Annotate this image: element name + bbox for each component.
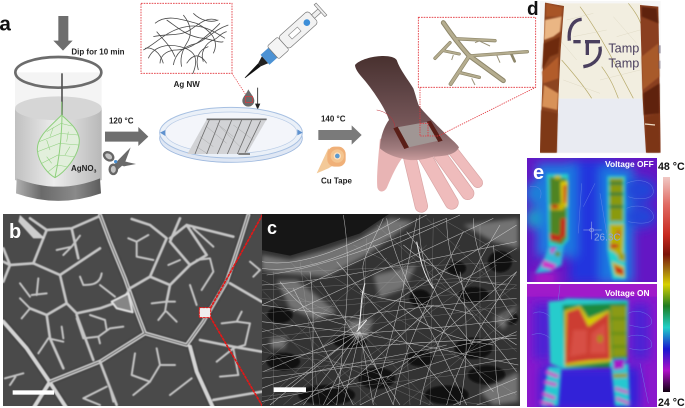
pinky finger bbox=[452, 150, 478, 183]
thermal image: voltage off bbox=[525, 157, 658, 285]
vein halo bbox=[29, 332, 198, 389]
ring finger bbox=[440, 155, 468, 193]
treated leaf bbox=[187, 119, 267, 154]
index finger bbox=[410, 158, 421, 206]
text: AgNO3: AgNO bbox=[71, 164, 94, 173]
nanowire fibres bbox=[262, 215, 518, 405]
logo text bbox=[608, 41, 639, 71]
hand bbox=[355, 56, 478, 206]
copper tape right bbox=[640, 5, 661, 153]
colour scale bbox=[658, 161, 685, 408]
electrode mesh bbox=[397, 122, 442, 147]
panel d: photo of leaf electrode bbox=[540, 1, 661, 153]
icon: pipette bbox=[239, 3, 327, 84]
finger fills bbox=[410, 150, 478, 206]
leaf bbox=[37, 102, 79, 178]
text: 140 C: 140 °C bbox=[321, 114, 346, 123]
palm and arm bbox=[355, 56, 459, 160]
scale bar bbox=[274, 387, 306, 392]
tertiary veins bbox=[5, 228, 260, 405]
right strip bbox=[607, 176, 626, 279]
text: AgNO3: 3 bbox=[94, 169, 97, 175]
shadow pores bbox=[267, 251, 518, 405]
logo bbox=[569, 19, 600, 67]
thumb side bbox=[377, 138, 403, 192]
text: voltage off: Voltage OFF bbox=[605, 159, 654, 169]
left copper strip bbox=[393, 127, 409, 149]
panel a: fabrication schematic bbox=[0, 3, 362, 201]
exposed dark background bbox=[262, 213, 390, 256]
icon: scissors bbox=[102, 147, 136, 174]
inset: Ag NW wires bbox=[141, 3, 232, 74]
scale max label: 48 °C bbox=[658, 161, 685, 173]
scale bar bbox=[663, 177, 670, 392]
connector to droplet bbox=[232, 73, 246, 95]
petri dish with leaf bbox=[160, 107, 303, 162]
arrow: to petri dish bbox=[105, 127, 148, 146]
panel c: SEM image of nanowire network bbox=[262, 213, 520, 406]
wire line bbox=[377, 110, 395, 127]
label b: b bbox=[9, 221, 21, 243]
inset: branching nanowires bbox=[418, 17, 536, 136]
text: voltage on: Voltage ON bbox=[605, 288, 650, 298]
text: dip for 10 min: Dip for 10 min bbox=[71, 48, 125, 57]
bright node bbox=[112, 293, 133, 312]
label c: c bbox=[267, 218, 277, 238]
logo text: Tamp bbox=[608, 57, 639, 71]
arrow: to hand bbox=[318, 125, 362, 145]
right copper strip bbox=[427, 121, 443, 142]
text: Cu Tape: Cu Tape bbox=[321, 176, 352, 185]
arrow: dip down bbox=[53, 16, 73, 51]
panel e: thermal images bbox=[525, 157, 658, 408]
middle finger bbox=[425, 157, 452, 203]
scale bar bbox=[13, 390, 54, 395]
red selection square and zoom lines bbox=[199, 308, 211, 318]
thermal image: voltage off: 26.3C bbox=[594, 233, 621, 244]
lower leads bbox=[539, 359, 630, 406]
label e: e bbox=[533, 162, 544, 184]
text: 120 C: 120 °C bbox=[109, 117, 134, 126]
left strip bbox=[547, 174, 568, 248]
panel a: hand with electrode bbox=[355, 17, 536, 206]
icon: Cu tape bbox=[317, 147, 346, 173]
icon: droplet bbox=[242, 89, 254, 107]
logo text: Tamp bbox=[608, 41, 639, 55]
crosshair text bbox=[583, 222, 602, 239]
lower left leads bbox=[535, 247, 563, 273]
arrow: drop direction bbox=[256, 88, 260, 109]
bright tissue bbox=[262, 218, 518, 405]
panel b: SEM image of leaf veins bbox=[3, 214, 262, 408]
thermal image: voltage on bbox=[527, 283, 658, 408]
paper and leaf bbox=[540, 1, 661, 153]
secondary veins bbox=[3, 217, 262, 405]
text: Ag NW: Ag NW bbox=[174, 80, 200, 89]
heated electrode bbox=[548, 298, 628, 369]
copper tape left bbox=[540, 3, 564, 153]
logo text remnant right of tape bbox=[658, 45, 661, 69]
main veins bbox=[3, 215, 248, 408]
beaker with leaf bbox=[15, 57, 102, 201]
